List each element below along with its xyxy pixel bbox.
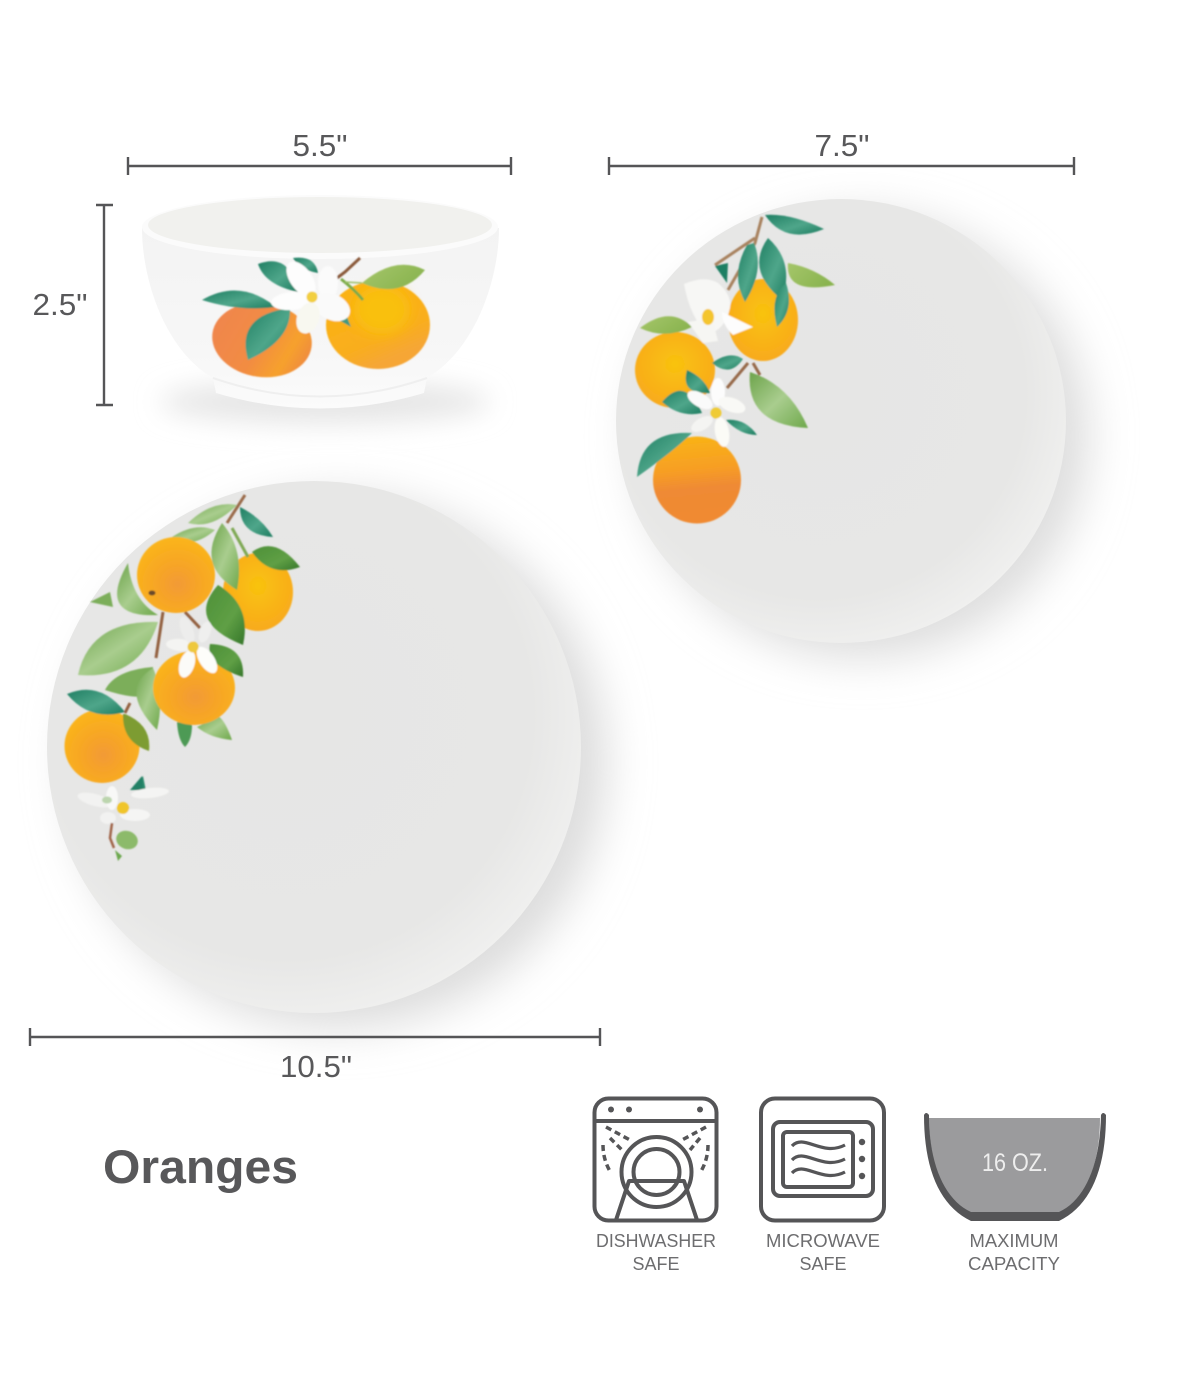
dinner plate decoration <box>64 495 300 861</box>
label: maximum capacity: MAXIMUM <box>970 1230 1058 1251</box>
dinner plate with oranges <box>47 481 606 1028</box>
salad plate decoration <box>635 215 835 524</box>
icon: dishwasher safe <box>594 1098 717 1220</box>
icon: microwave safe <box>761 1098 884 1220</box>
label: microwave safe <box>766 1230 880 1274</box>
bowl body <box>142 228 499 408</box>
dimension: bowl height 2.5 inches <box>32 205 113 405</box>
label: maximum capacity: CAPACITY <box>968 1253 1060 1274</box>
dimension: salad plate width 7.5 inches: 7.5" <box>814 128 870 163</box>
bowl with oranges <box>142 195 499 424</box>
plate surface <box>47 481 581 1013</box>
plate surface <box>616 199 1066 643</box>
label: microwave safe: SAFE <box>800 1253 846 1274</box>
label: dishwasher safe: DISHWASHER <box>596 1230 716 1251</box>
bowl foot edge <box>213 378 427 396</box>
dimension: bowl height 2.5 inches: 2.5" <box>32 287 88 322</box>
bowl interior <box>148 197 492 253</box>
label: microwave safe: MICROWAVE <box>766 1230 880 1251</box>
dimension: dinner plate width 10.5 inches: 10.5" <box>280 1049 352 1084</box>
bowl decoration <box>202 256 430 384</box>
icon: bowl with 16 oz capacity <box>924 1113 1106 1221</box>
dimension: dinner plate width 10.5 inches <box>30 1028 600 1084</box>
dimension: salad plate width 7.5 inches <box>609 128 1074 175</box>
title: Oranges: Oranges <box>103 1140 298 1193</box>
icon: bowl with 16 oz capacity: 16 OZ. <box>982 1149 1048 1177</box>
label: dishwasher safe <box>596 1230 716 1274</box>
label: maximum capacity <box>968 1230 1060 1274</box>
bowl rim <box>142 195 498 259</box>
salad plate with oranges <box>616 199 1088 658</box>
dimension: bowl width 5.5 inches <box>128 128 511 175</box>
label: dishwasher safe: SAFE <box>632 1253 680 1274</box>
dimension: bowl width 5.5 inches: 5.5" <box>292 128 348 163</box>
